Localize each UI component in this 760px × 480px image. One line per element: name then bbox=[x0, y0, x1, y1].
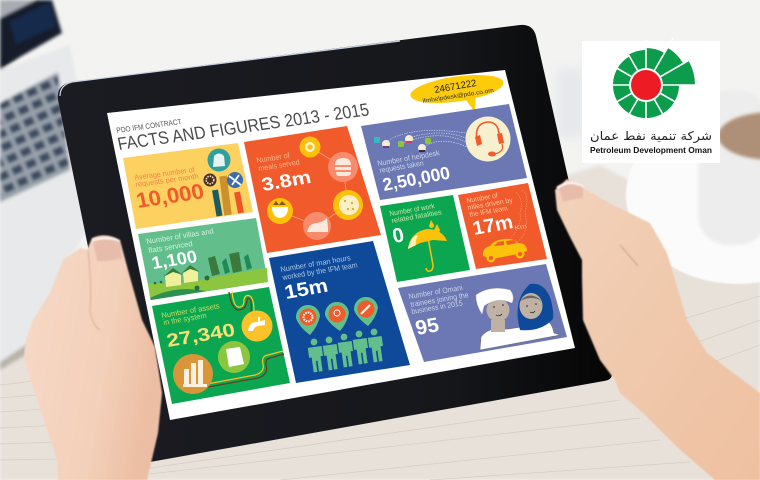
panel: man hours: worked by the IFM team bbox=[281, 260, 358, 282]
panel: assets in the system bbox=[152, 287, 290, 404]
icon: five staff figures bbox=[307, 328, 385, 373]
icon: headset bbox=[466, 116, 510, 162]
panel: villas and flats: Number of villas and bbox=[146, 226, 214, 246]
icon: connected meal circles bbox=[267, 136, 363, 240]
panel: miles driven: the IFM team bbox=[469, 204, 508, 219]
icon: PDO emblem bbox=[607, 38, 700, 125]
panel: meals served: meals served bbox=[258, 158, 300, 173]
icon: tap bbox=[242, 310, 272, 342]
panel: miles driven: Number of bbox=[466, 192, 498, 205]
title block: FACTS AND FIGURES 2013 - 2015 bbox=[116, 99, 371, 154]
tablet body bbox=[58, 25, 612, 463]
right hand bbox=[555, 179, 760, 480]
panel: meals served: 3.8m bbox=[259, 166, 313, 195]
panel: Omani trainees: trainees joining the bbox=[410, 290, 469, 309]
panel: assets in the system: Number of assets bbox=[161, 301, 221, 320]
panel: assets in the system: 27,340 bbox=[164, 319, 237, 351]
icon: door bbox=[218, 341, 250, 373]
panel: miles driven: miles driven by bbox=[467, 196, 514, 212]
icon: location pins bbox=[296, 297, 378, 335]
panel: villas and flats bbox=[138, 218, 268, 300]
panel: man hours: Number of man hours bbox=[280, 253, 352, 274]
panel: villas and flats: flats serviced bbox=[148, 239, 193, 255]
panel: helpdesk requests: Number of helpdesk bbox=[377, 148, 441, 168]
panel: Omani trainees bbox=[398, 264, 567, 362]
panel: helpdesk requests: 2,50,000 bbox=[381, 163, 452, 195]
callout: helpdesk contact bubble: ifmhelpdesk@pdo.co.om bbox=[422, 87, 494, 105]
panel: Omani trainees: business in 2015 bbox=[411, 298, 463, 316]
title block: PDO IFM CONTRACT bbox=[116, 117, 183, 135]
panel: miles driven bbox=[458, 183, 547, 269]
callout: helpdesk contact bubble bbox=[409, 70, 505, 112]
logo Arabic name: شركة تنمية نفط عمان bbox=[590, 129, 712, 144]
icon: umbrella bbox=[408, 220, 447, 271]
panel: Omani trainees: Number of Omani bbox=[408, 283, 464, 301]
panel: helpdesk requests: requests taken bbox=[379, 158, 424, 175]
panel: meals served bbox=[244, 126, 381, 253]
panel: miles driven: Km bbox=[514, 223, 527, 232]
icon: yellow car bbox=[483, 239, 527, 262]
panel: miles driven: 17m bbox=[470, 211, 515, 240]
panel: villas and flats: 1,100 bbox=[150, 246, 199, 273]
panel: man hours: 15m bbox=[282, 275, 330, 304]
panel: requests per month: 10,000 bbox=[134, 179, 206, 213]
panel: assets in the system: in the system bbox=[163, 311, 207, 327]
tablet screen bbox=[107, 70, 575, 420]
panel: helpdesk requests bbox=[361, 104, 527, 200]
laptop, blurred background bbox=[0, 0, 100, 370]
icon: raised arms with tools bbox=[204, 148, 243, 216]
callout: helpdesk contact bubble: 24671222 bbox=[433, 78, 478, 96]
logo English name: Petroleum Development Oman bbox=[590, 146, 712, 155]
left hand bbox=[24, 235, 162, 480]
panel: Omani trainees: 95 bbox=[413, 314, 441, 340]
panel: work fatalities: 0 bbox=[390, 224, 406, 248]
panel: work fatalities: related fatalities bbox=[391, 208, 443, 225]
icon: callers network bbox=[374, 130, 467, 152]
icon: pipes bbox=[207, 291, 284, 387]
panel: requests per month: requests per month bbox=[135, 172, 199, 189]
coffee cup and saucer bbox=[556, 68, 760, 284]
logo: Petroleum Development Oman bbox=[582, 38, 720, 163]
panel: man hours bbox=[269, 241, 410, 383]
illustration: two Omani trainees bbox=[476, 284, 560, 350]
icon: refinery bbox=[173, 354, 213, 394]
panel: meals served: Number of bbox=[256, 151, 291, 165]
panel: work fatalities bbox=[380, 195, 470, 282]
illustration: houses and towers on hill bbox=[148, 252, 268, 300]
panel: requests per month: Average number of bbox=[134, 165, 196, 182]
panel: work fatalities: Number of work bbox=[389, 202, 436, 218]
panel: requests per month bbox=[123, 143, 253, 229]
